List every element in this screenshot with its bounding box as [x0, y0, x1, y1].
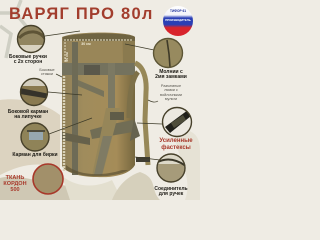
label: removable straps: Разъемные	[161, 84, 181, 88]
label: side pocket: на липучке	[14, 114, 42, 120]
detail circle: tag pocket	[22, 124, 50, 152]
label: fabric	[3, 175, 27, 193]
label: removable straps: мульти	[165, 97, 177, 101]
detail circle: fabric swatch	[33, 164, 63, 194]
duffel bag	[62, 32, 150, 177]
label: reinforced buckles: Усиленные	[159, 138, 193, 144]
detail circle: zippers	[153, 39, 183, 68]
background camo shapes	[0, 99, 200, 200]
label: zippers: 2мя замками	[155, 74, 187, 80]
label: side straps: стяжки	[41, 72, 53, 76]
label: reinforced buckles: фастексы	[161, 144, 191, 150]
label: removable straps: лямки с	[164, 88, 178, 92]
title: ВАРЯГ ПРО 80л	[9, 4, 154, 23]
label: side handles: с 2х сторон	[14, 59, 42, 65]
label: side handles	[9, 54, 47, 65]
label: side straps: Боковые	[39, 68, 55, 72]
label: reinforced buckles	[159, 138, 193, 150]
label: tag pocket: Карман для бирки	[12, 152, 58, 158]
label: fabric: КОРДОН	[3, 181, 27, 187]
label: removable straps: войлочными	[160, 93, 182, 97]
label: handle connector	[154, 186, 188, 197]
flag text top: ТИФОР 61	[170, 9, 186, 13]
measurement lines	[64, 40, 133, 172]
label: zippers: Молнии с	[159, 69, 183, 75]
label: side handles: Боковые ручки	[9, 54, 47, 60]
background camouflage and bag	[0, 0, 200, 200]
label: side straps	[39, 68, 55, 76]
label: side pocket: Боковой карман	[8, 109, 48, 115]
flag text middle: ПРОИЗВОДИТЕЛЬ	[165, 18, 191, 22]
detail circle: handle connector	[156, 153, 186, 183]
leader lines	[45, 31, 162, 160]
background star outline	[0, 0, 26, 58]
detail circle: side pocket	[20, 79, 48, 105]
label: side pocket	[8, 109, 48, 120]
label: handle connector: для ручек	[159, 191, 183, 197]
label: fabric: 500	[10, 187, 20, 193]
flag badge	[163, 6, 193, 36]
label: removable straps	[160, 84, 182, 101]
detail circle: buckle	[165, 111, 191, 136]
size label width: 30 см	[81, 42, 91, 46]
size label height: 90 см	[65, 52, 69, 62]
detail circle: side handles	[17, 26, 45, 52]
label: fabric: ТКАНЬ	[6, 175, 24, 181]
label: zippers	[155, 69, 187, 80]
label: handle connector: Соединитель	[154, 186, 188, 192]
